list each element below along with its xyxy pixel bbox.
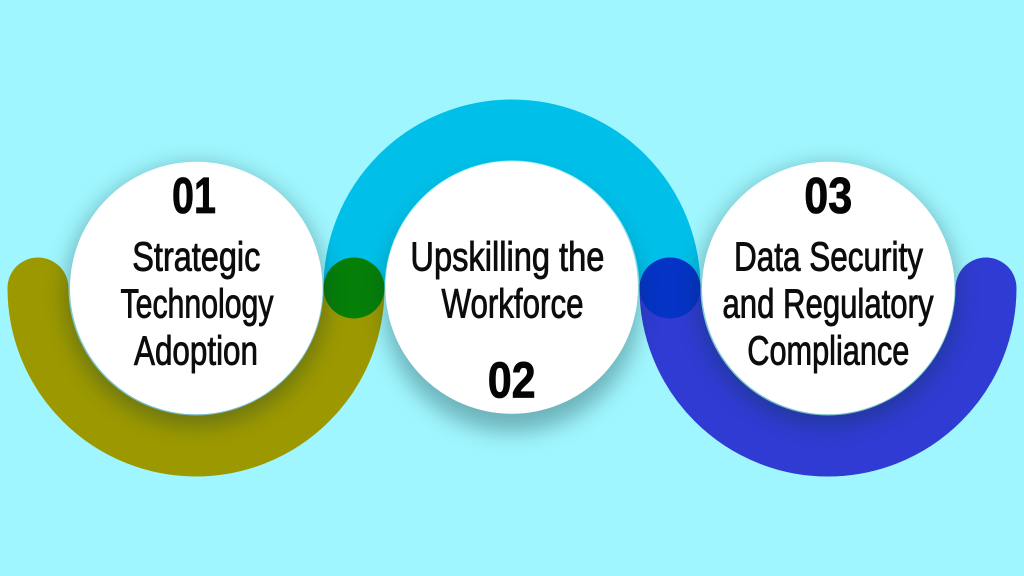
label: Data Security and Regulatory Compliance: Compliance (747, 328, 909, 374)
panel: step 01 (70, 162, 323, 414)
panel: step 03 (702, 162, 955, 414)
number 02: 02 (488, 352, 536, 408)
label: Data Security and Regulatory Compliance: Data Security (734, 234, 923, 280)
overlap: dark blue joint (640, 258, 700, 318)
label: Data Security and Regulatory Compliance (722, 234, 934, 374)
arc: blue right (670, 288, 986, 446)
number 03: 03 (804, 167, 852, 224)
arc: cyan top (354, 130, 670, 288)
circle shadows (66, 165, 958, 432)
arc: olive left (38, 288, 354, 446)
label: Strategic Technology Adoption: Technology (120, 280, 274, 326)
label: Strategic Technology Adoption: Strategic (132, 234, 260, 280)
number 01: 01 (172, 167, 216, 224)
label: Strategic Technology Adoption: Adoption (134, 328, 258, 374)
overlap: green joint (324, 258, 384, 318)
label: Upskilling the Workforce: Workforce (442, 280, 584, 326)
label: Upskilling the Workforce: Upskilling the (410, 234, 604, 280)
label: Upskilling the Workforce (410, 234, 604, 326)
panel: step 02 (385, 161, 638, 414)
label: Data Security and Regulatory Compliance: and Regulatory (722, 280, 934, 326)
label: Strategic Technology Adoption (120, 234, 274, 374)
